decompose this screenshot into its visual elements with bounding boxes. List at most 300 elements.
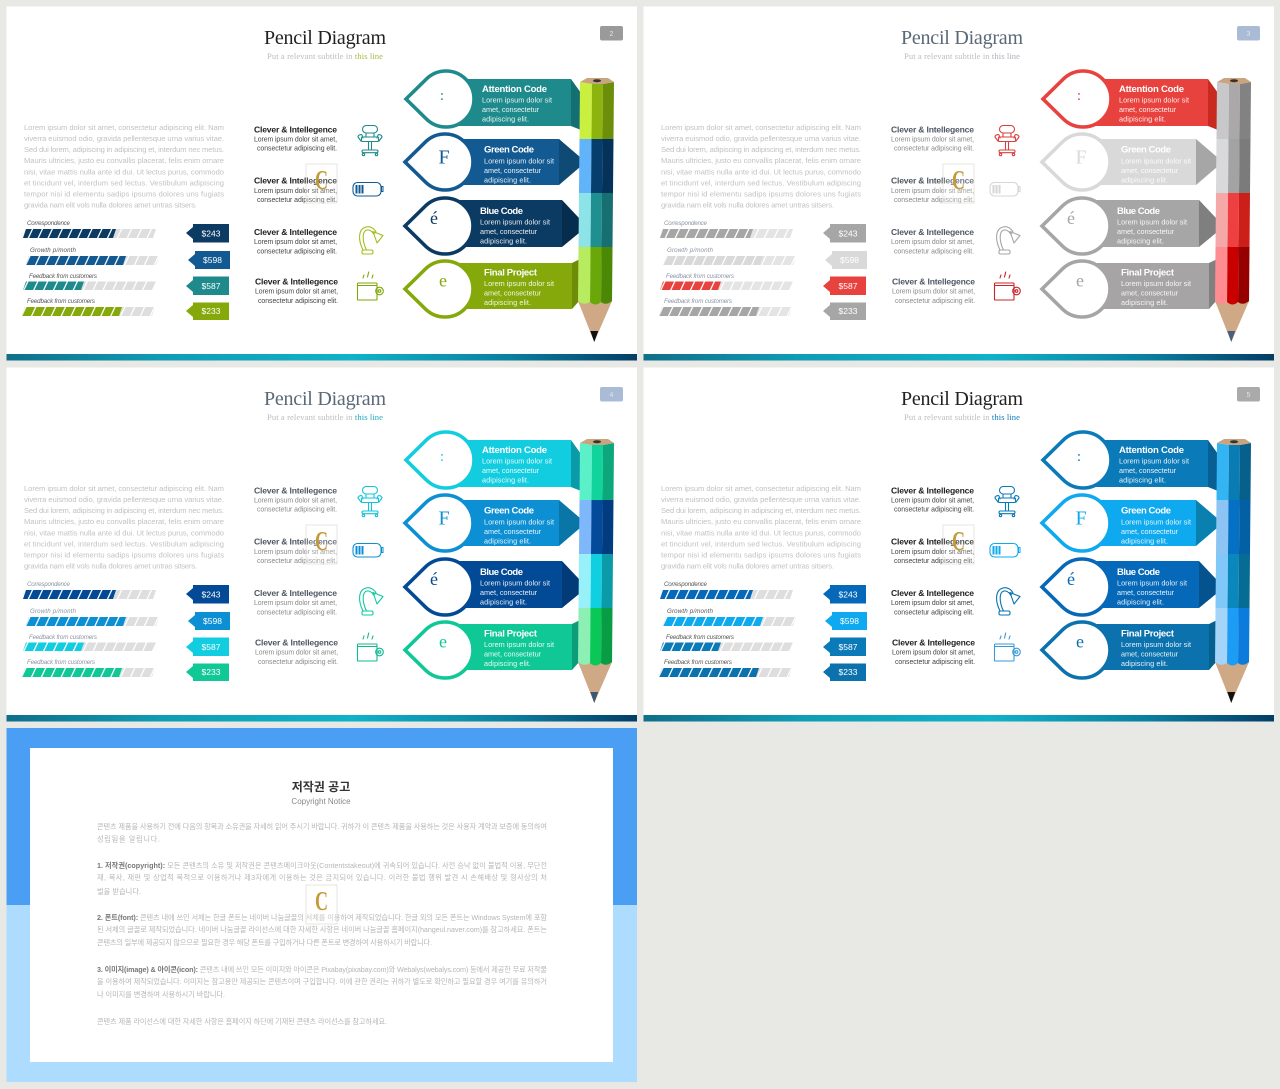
band texts: Final Project [484,628,538,640]
progress bars: Feedback from customers [666,634,734,641]
band texts: adipiscing elit. [1121,176,1168,184]
body paragraph: Lorem ipsum dolor sit amet, consectetur adipiscing elit. Nam [661,123,861,132]
band texts: Lorem ipsum dolor sit [484,518,554,526]
body paragraph: viverra euismod odio, gravida pellentesque urna varius vitae. [661,495,861,504]
drop 4 [1042,622,1110,678]
icon: coffee mug [994,272,1020,300]
band texts: Green Code [1121,144,1171,156]
watermark: C [952,165,965,195]
icon: battery [990,544,1020,557]
feature list text: Clever & Intellegence [254,125,337,135]
price tags: $598 [840,255,859,265]
band texts: amet, consectetur [484,650,542,658]
body paragraph: et tincidunt vel, interdum sed lectus. Vestibulum adipiscing [24,539,224,548]
band texts: adipiscing elit. [482,476,529,484]
icon: chair [995,126,1019,156]
band texts: Lorem ipsum dolor sit [482,456,552,466]
drop 2 [1042,495,1110,551]
drop 3 [405,198,473,254]
body paragraph: gravida nam elit vols nulla dolores amet untras sitsers. [661,201,834,210]
watermark [306,164,337,203]
feature list text: Clever & Intellegence [892,637,975,647]
icon: coffee mug [358,272,383,300]
body paragraph: viverra euismod odio, gravida pellentesque urna varius vitae. [661,134,861,143]
price tags: $598 [203,255,222,265]
body paragraph: Sed dui lorem, adipiscing in adipiscing et, interdum nec metus. [24,145,224,154]
feature list text: Clever & Intellegence [891,125,974,135]
band texts: adipiscing elit. [1117,236,1164,246]
icon: chair [358,486,382,517]
drop 1: : [440,449,444,465]
slide 5: copyright notice [6,728,637,1082]
icon: desk lamp [997,227,1020,254]
body paragraph: Mauris ultricies, justo eu convallis placerat, felis enim ornare [24,156,224,165]
progress bars: Growth p/month [30,608,77,615]
subtitle: Put a relevant subtitle in this line [904,412,1020,422]
band texts: Lorem ipsum dolor sit [484,640,554,649]
icon: battery [990,182,1020,196]
body paragraph: Mauris ultricies, justo eu convallis placerat, felis enim ornare [24,517,224,526]
notice body text: 벌을 받습니다. [97,887,141,896]
price tags: $243 [839,590,858,600]
body paragraph: et tincidunt vel, interdum sed lectus. Vestibulum adipiscing [661,539,861,548]
band texts: adipiscing elit. [482,114,529,124]
bottom band [6,715,637,722]
feature list text: Lorem ipsum dolor sit amet, [891,188,974,195]
title: Pencil Diagram [264,388,386,410]
band texts: Attention Code [1119,84,1184,95]
band texts: Blue Code [1117,206,1160,217]
feature list text [254,125,338,305]
band texts: adipiscing elit. [484,298,531,307]
arrow band 3: blue code [450,200,579,247]
progress bars: Correspondence [27,220,71,227]
drop 3 [1042,559,1110,615]
band texts: amet, consectetur [1121,650,1179,658]
band texts: Lorem ipsum dolor sit [484,279,554,288]
feature list text: consectetur adipiscing elit. [258,659,338,666]
slide 4: pencil diagram, blue tones [644,368,1274,722]
feature list text: Lorem ipsum dolor sit amet, [254,239,337,246]
body paragraph: Lorem ipsum dolor sit amet, consectetur adipiscing elit. Nam [24,123,224,132]
feature list text: consectetur adipiscing elit. [894,146,974,153]
progress bars: Correspondence [664,581,708,588]
drop 1: : [440,88,444,104]
page number badge [600,26,623,40]
arrow band 3: blue code [450,561,579,608]
feature list text: Lorem ipsum dolor sit amet, [254,600,337,607]
drop 2 [405,495,473,551]
watermark [306,885,337,924]
body paragraph: viverra euismod odio, gravida pellentesque urna varius vitae. [24,134,224,143]
band texts: Lorem ipsum dolor sit [480,218,550,226]
drop 2: F [1075,146,1087,168]
subtitle: Put a relevant subtitle in this line [267,412,383,422]
body paragraph: et tincidunt vel, interdum sed lectus. Vestibulum adipiscing [661,178,861,187]
band texts: Attention Code [1119,445,1184,456]
drop 2: F [438,146,450,168]
feature list text: Lorem ipsum dolor sit amet, [254,137,337,144]
drop 3 [1042,198,1110,254]
band texts [480,445,554,668]
body paragraph: Lorem ipsum dolor sit amet, consectetur adipiscing elit. Nam [661,484,861,493]
band texts: adipiscing elit. [1121,298,1168,307]
feature list text: consectetur adipiscing elit. [257,558,337,565]
band texts: amet, consectetur [1119,466,1177,475]
notice body text: 된 서체의 글꼴로 제작되었습니다. 네이버 나눔글꼴 라이선스에 대한 자세한 사항은 네이버 나눔글꼴 홈페이지(hangeul.naver.com)를 참고하세요. 폰트는 [97,925,547,934]
feature list text: consectetur adipiscing elit. [257,507,337,514]
drop 4 [405,622,473,678]
price tags: $233 [839,667,858,677]
body paragraph [24,123,224,210]
band texts: Lorem ipsum dolor sit [1121,518,1191,526]
price tags: $233 [839,306,858,316]
feature list text: Lorem ipsum dolor sit amet, [891,549,974,556]
band texts: Final Project [484,268,538,278]
bottom band [644,354,1274,360]
band texts: amet, consectetur [1117,588,1175,597]
icon: battery [353,182,383,196]
feature list text: Lorem ipsum dolor sit amet, [892,289,975,296]
arrow band 4: final project [450,259,580,309]
watermark [306,525,337,564]
price tags: $233 [202,306,221,316]
page number badge: 5 [1247,392,1251,399]
pencil [578,439,614,703]
drop 3: é [1067,569,1075,589]
feature list text: consectetur adipiscing elit. [257,197,337,204]
arrow band 3: blue code [1087,561,1216,608]
body paragraph: nisi, vitae mattis nulla ante id dui. Ut lectus purus, commodo [24,528,224,537]
progress bars: Growth p/month [667,247,714,254]
drop 4 [405,261,473,317]
notice body text: 을 이용하여 제작되었습니다. 이미지는 참고용만 제공되는 콘텐츠이며 구입합니다. 이에 관한 권리는 귀하가 별도로 확인하고 필요할 경우 여기를 유의하거 [97,977,547,986]
icon: battery [353,544,383,557]
feature list text: Clever & Intellegence [254,176,337,186]
icon: desk lamp [360,227,383,254]
icon: desk lamp [360,588,383,615]
progress bars: Growth p/month [30,247,77,254]
band texts: adipiscing elit. [484,659,531,668]
arrow band 2: green code [450,500,580,546]
feature list text: consectetur adipiscing elit. [894,558,974,565]
drop 1 [406,71,474,127]
progress bars: Feedback from customers [664,298,732,305]
price tags: $598 [840,616,859,626]
band texts: Lorem ipsum dolor sit [1119,456,1189,466]
band texts: Lorem ipsum dolor sit [1121,279,1191,288]
feature list text: Clever & Intellegence [255,276,338,286]
price tags [186,224,230,320]
band texts: adipiscing elit. [1119,114,1166,124]
arrow band 2: green code [450,139,580,185]
body paragraph [661,123,861,210]
band texts: Blue Code [480,206,523,217]
progress bars: Feedback from customers [666,273,734,280]
progress bars: Correspondence [27,581,71,588]
feature list text: Clever & Intellegence [891,486,974,496]
body paragraph: tempor nisi id elementu sadips ipsums dolores uns fugiats [24,550,224,560]
drop 4: e [1076,632,1084,652]
title: Pencil Diagram [901,388,1023,410]
body paragraph: gravida nam elit vols nulla dolores amet untras sitsers. [24,562,197,571]
body paragraph: nisi, vitae mattis nulla ante id dui. Ut lectus purus, commodo [661,528,861,537]
feature list text [254,486,338,666]
watermark: C [315,165,328,195]
band texts: Lorem ipsum dolor sit [1119,96,1189,104]
band texts: Attention Code [482,84,547,95]
band texts: amet, consectetur [1121,166,1179,175]
progress bars: Feedback from customers [29,634,97,641]
feature list text: Lorem ipsum dolor sit amet, [891,600,974,607]
feature list text: Clever & Intellegence [254,486,337,496]
notice body text: 2. 폰트(font): 콘텐츠 내에 쓰인 서체는 한글 폰트는 네이버 나눔글꼴의 서체를 이용하여 제작되었습니다. 한글 외의 모든 폰트는 Windows System에 포함 [97,913,547,922]
band texts [480,84,554,307]
page number badge: 2 [610,31,614,38]
body paragraph: nisi, vitae mattis nulla ante id dui. Ut lectus purus, commodo [24,167,224,176]
band texts: Lorem ipsum dolor sit [1117,578,1187,588]
band texts: Green Code [1121,506,1171,516]
body paragraph: gravida nam elit vols nulla dolores amet untras sitsers. [661,562,834,571]
progress bars: Feedback from customers [29,273,97,280]
band texts: adipiscing elit. [484,176,531,184]
price tags: $243 [202,228,221,238]
page number badge: 4 [610,392,614,399]
band texts: Green Code [484,506,534,516]
body paragraph: Sed dui lorem, adipiscing in adipiscing et, interdum nec metus. [661,506,861,515]
drop 4: e [1076,270,1084,290]
drop 4: e [439,270,447,290]
price tags: $598 [203,616,222,626]
price tags [823,585,867,681]
arrow band 2: green code [1087,500,1217,546]
progress bars [659,220,796,316]
subtitle: Put a relevant subtitle in this line [904,51,1020,61]
feature list text: Lorem ipsum dolor sit amet, [254,498,337,505]
body paragraph: viverra euismod odio, gravida pellentesque urna varius vitae. [24,495,224,504]
drop 3 [405,559,473,615]
arrow band 3: blue code [1087,200,1216,247]
pencil [578,78,614,342]
band texts: amet, consectetur [1121,527,1179,536]
feature list text: Clever & Intellegence [254,537,337,547]
price tags: $243 [839,228,858,238]
body paragraph: Sed dui lorem, adipiscing in adipiscing et, interdum nec metus. [24,506,224,515]
drop 1 [406,432,474,488]
price tags [823,224,867,320]
drop 1 [1043,71,1111,127]
band texts: amet, consectetur [480,588,538,597]
title: Pencil Diagram [264,27,386,49]
price tags: $587 [839,642,858,652]
icon: chair [995,486,1019,517]
icon: desk lamp [997,588,1020,615]
feature list text: Lorem ipsum dolor sit amet, [891,137,974,144]
band texts: Blue Code [480,567,523,578]
icon: coffee mug [994,633,1020,661]
band texts: adipiscing elit. [480,236,527,246]
price tags: $233 [202,667,221,677]
band texts: amet, consectetur [484,288,542,298]
progress bars: Feedback from customers [27,298,95,305]
band texts: Lorem ipsum dolor sit [480,578,550,588]
feature list text: consectetur adipiscing elit. [894,610,974,616]
notice heading: 저작권 공고 [292,779,350,794]
progress bars [659,581,796,677]
title: Pencil Diagram [901,27,1023,49]
body paragraph: tempor nisi id elementu sadips ipsums dolores uns fugiats [24,190,224,198]
feature list text: Lorem ipsum dolor sit amet, [254,549,337,556]
drop 2: F [1075,508,1087,530]
feature list text: Clever & Intellegence [891,537,974,547]
progress bars: Correspondence [664,220,708,227]
notice body text [97,822,547,1026]
body paragraph [24,484,224,571]
arrow band 1: attention code [1087,440,1218,491]
page number badge [1237,387,1260,402]
body paragraph: Mauris ultricies, justo eu convallis placerat, felis enim ornare [661,517,861,526]
feature list text: consectetur adipiscing elit. [894,197,974,204]
band texts: amet, consectetur [482,466,540,475]
drop 2 [1042,134,1110,190]
feature list text: Clever & Intellegence [254,227,337,237]
band texts: amet, consectetur [484,166,542,175]
feature list text: Clever & Intellegence [891,227,974,237]
band texts: Lorem ipsum dolor sit [482,96,552,104]
price tags: $587 [839,281,858,291]
drop 2: F [438,508,450,530]
band texts: Attention Code [482,445,547,456]
body paragraph: Mauris ultricies, justo eu convallis placerat, felis enim ornare [661,156,861,165]
arrow band 4: final project [1087,259,1217,309]
band texts [1117,84,1191,307]
arrow band 1: attention code [450,440,581,491]
body paragraph: Sed dui lorem, adipiscing in adipiscing et, interdum nec metus. [661,145,861,154]
feature list text [891,125,975,305]
feature list text: consectetur adipiscing elit. [894,248,974,256]
bottom band [6,354,637,360]
body paragraph: tempor nisi id elementu sadips ipsums dolores uns fugiats [661,550,861,560]
band texts: Lorem ipsum dolor sit [1121,156,1191,166]
drop 2 [405,134,473,190]
page number badge: 3 [1247,31,1251,38]
notice body text: 성립됨을 알립니다. [97,834,160,844]
feature list text: Lorem ipsum dolor sit amet, [892,650,975,657]
notice body text: 콘텐츠 제품을 사용하기 전에 다음의 항목과 소유권을 자세히 읽어 주시기 바랍니다. 귀하가 이 콘텐츠 제품을 사용하는 것은 사용자 계약과 보증에 동의하여 [97,822,547,831]
arrow band 1: attention code [450,79,581,130]
watermark: C [952,526,965,556]
feature list text: consectetur adipiscing elit. [257,248,337,256]
watermark: C [315,526,328,556]
feature list text [891,486,975,666]
drop 1 [1043,432,1111,488]
pencil [1215,78,1251,342]
feature list text: consectetur adipiscing elit. [257,610,337,616]
notice body text: 콘텐츠 제품 라이선스에 대한 자세한 사항은 홈페이지 하단에 기재된 콘텐츠 라이선스를 참고하세요. [97,1017,387,1026]
band texts: Green Code [484,144,534,156]
notice body text: 콘텐츠의 일부에 제공되지 않으므로 필요한 경우 해당 폰트를 구입하거나 다른 폰트로 변경하여 사용하시기 바랍니다. [97,938,432,947]
body paragraph: et tincidunt vel, interdum sed lectus. Vestibulum adipiscing [24,178,224,187]
feature list text: consectetur adipiscing elit. [257,146,337,153]
drop 3: é [430,208,438,228]
band texts: adipiscing elit. [1121,659,1168,668]
band texts: adipiscing elit. [1117,598,1164,606]
slide 2: pencil diagram, grey and red [644,6,1274,360]
icon: coffee mug [358,633,383,661]
pencil [1215,439,1251,703]
feature list text: consectetur adipiscing elit. [895,659,975,666]
feature list text: Lorem ipsum dolor sit amet, [255,289,338,296]
body paragraph: Lorem ipsum dolor sit amet, consectetur adipiscing elit. Nam [24,484,224,493]
progress bars: Feedback from customers [664,659,732,666]
feature list text: Clever & Intellegence [255,637,338,647]
band texts: Final Project [1121,628,1175,640]
drop 1: : [1077,449,1081,465]
band texts: adipiscing elit. [480,598,527,606]
band texts: Blue Code [1117,567,1160,578]
slide 1: pencil diagram, green and teal [6,6,637,360]
progress bars [22,581,159,677]
band texts: amet, consectetur [480,227,538,236]
band texts: amet, consectetur [482,105,540,114]
notice body text: 1. 저작권(copyright): 모든 콘텐츠의 소유 및 저작권은 콘텐츠메이크아웃(Contentstakeout)에 귀속되어 있습니다. 사전 승낙 없이 불법적 이용, 무단전 [97,861,547,870]
feature list text: consectetur adipiscing elit. [894,507,974,514]
progress bars [22,220,159,316]
band texts: adipiscing elit. [1121,536,1168,546]
arrow band 2: green code [1087,139,1217,185]
feature list text: Lorem ipsum dolor sit amet, [255,650,338,657]
band texts: amet, consectetur [1121,288,1179,298]
band texts [1117,445,1191,668]
slide 3: pencil diagram, cyan and blue [6,368,637,722]
feature list text: consectetur adipiscing elit. [258,298,338,305]
body paragraph: gravida nam elit vols nulla dolores amet untras sitsers. [24,201,197,210]
band texts: Lorem ipsum dolor sit [1121,640,1191,649]
band texts: adipiscing elit. [1119,476,1166,484]
feature list text: Lorem ipsum dolor sit amet, [254,188,337,195]
band texts: Final Project [1121,268,1175,278]
price tags [186,585,230,681]
feature list text: Clever & Intellegence [891,176,974,186]
band texts: amet, consectetur [1119,105,1177,114]
page number badge [1237,26,1260,40]
band texts: amet, consectetur [484,527,542,536]
price tags: $243 [202,590,221,600]
notice body text: 나 이미지를 변경하여 사용하시기 바랍니다. [97,990,225,999]
feature list text: Clever & Intellegence [254,588,337,598]
band texts: amet, consectetur [1117,227,1175,236]
arrow band 4: final project [450,620,580,670]
drop 4 [1042,261,1110,317]
body paragraph: tempor nisi id elementu sadips ipsums dolores uns fugiats [661,190,861,198]
price tags: $587 [202,642,221,652]
watermark: C [315,886,328,916]
bottom band [644,715,1274,722]
drop 3: é [430,569,438,589]
notice body text: 3. 이미지(image) & 아이콘(icon): 콘텐츠 내에 쓰인 모든 이미지와 아이콘은 Pixabay(pixabay.com)와 Webalys(webalys.com) 등에서 제공한 무료 저작물 [97,965,547,974]
arrow band 1: attention code [1087,79,1218,130]
feature list text: Lorem ipsum dolor sit amet, [891,498,974,505]
band texts: adipiscing elit. [484,536,531,546]
price tags: $587 [202,281,221,291]
drop 3: é [1067,208,1075,228]
notice body text: 재, 복사, 재판 및 상업적 목적으로 이용하거나 제3자에게 이용하는 것은 금지되어 있습니다. 이러한 불법 행위 발견 시 손해배상 및 형사상의 처 [97,873,547,882]
watermark [943,525,974,564]
drop 1: : [1077,88,1081,104]
progress bars: Growth p/month [667,608,714,615]
body paragraph: nisi, vitae mattis nulla ante id dui. Ut lectus purus, commodo [661,167,861,176]
progress bars: Feedback from customers [27,659,95,666]
